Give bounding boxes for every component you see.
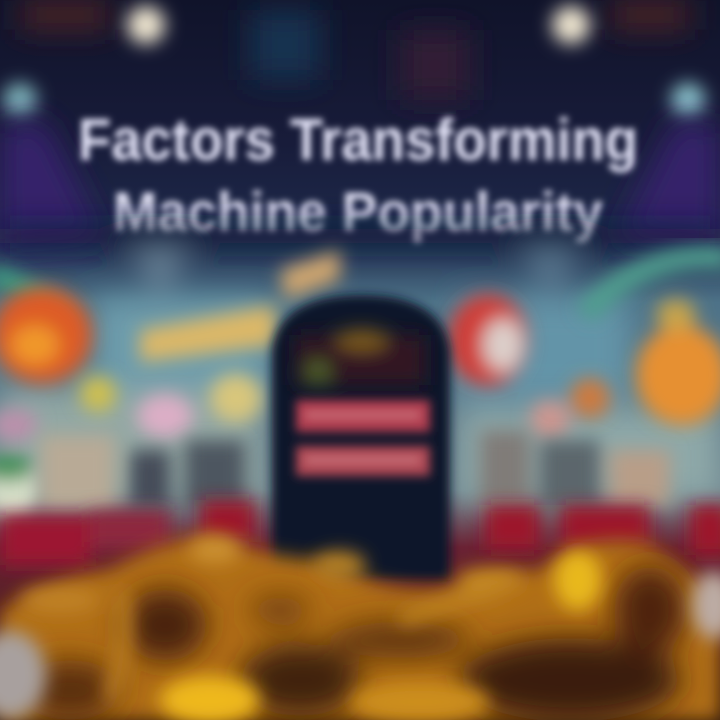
casino hall backdrop bbox=[0, 225, 720, 500]
grey foreground corners bbox=[0, 571, 720, 719]
rainbow arch bbox=[0, 257, 720, 320]
red seats bbox=[0, 500, 720, 565]
marquee sign bbox=[140, 250, 340, 362]
title bbox=[78, 107, 638, 243]
title: Machine Popularity bbox=[113, 180, 603, 243]
title: Factors Transforming bbox=[78, 107, 638, 173]
gold coins foreground bbox=[0, 535, 720, 720]
purple side drapes bbox=[0, 120, 720, 250]
slot machine bbox=[272, 295, 450, 580]
balloons and lanterns bbox=[0, 287, 720, 518]
ceiling lights bbox=[3, 0, 705, 117]
bright highlights bbox=[20, 537, 602, 720]
red reels bbox=[296, 400, 430, 476]
top display bbox=[295, 329, 425, 385]
cabinet bbox=[272, 295, 450, 580]
dark hollows bbox=[20, 566, 686, 720]
gold mound bbox=[0, 535, 720, 720]
machines row bbox=[40, 430, 670, 510]
